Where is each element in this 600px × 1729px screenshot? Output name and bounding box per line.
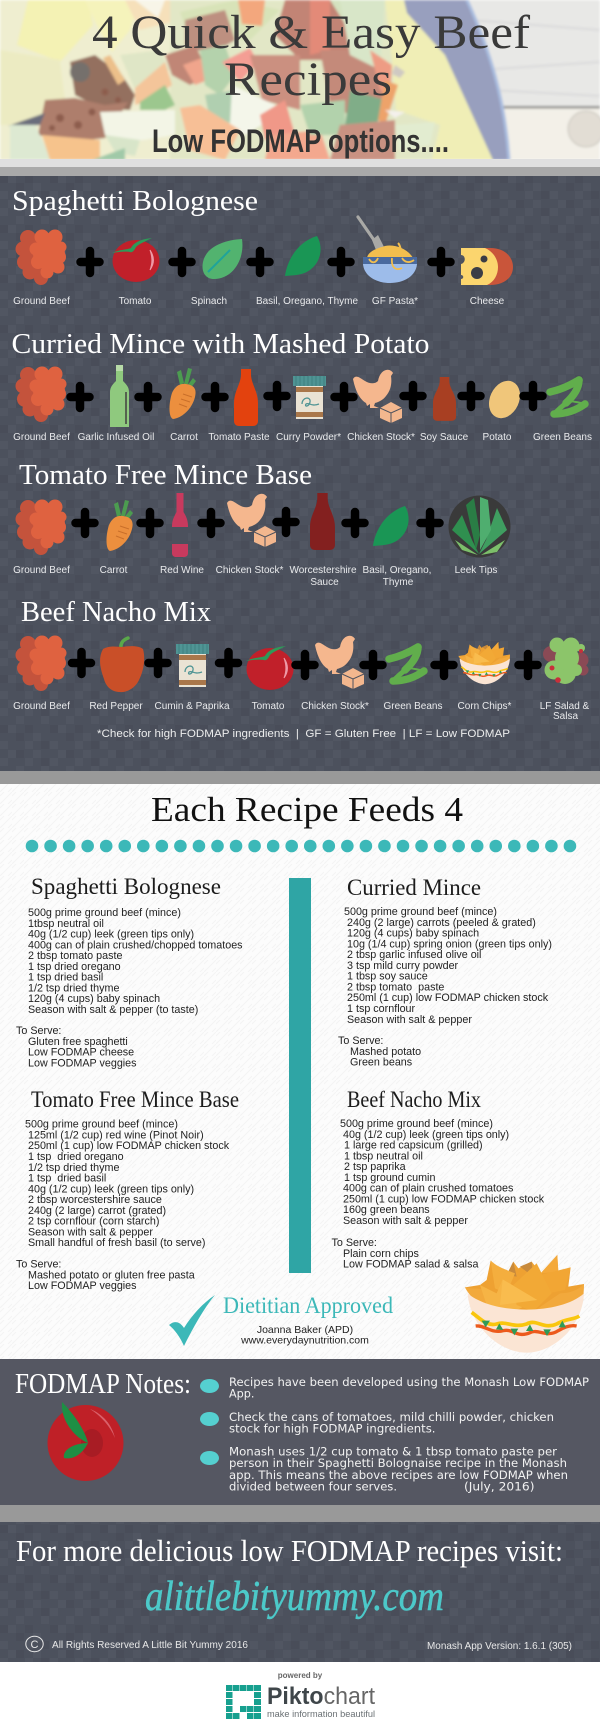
heading: FODMAP Notes: FODMAP Notes: [15, 1369, 191, 1400]
recipe: Spaghetti Bolognese: 40g (1/2 cup) leek (green tips only) [28, 928, 194, 940]
recipe: Beef Nacho Mix: 160g green beans [343, 1204, 430, 1216]
recipe: Tomato Free Mince Base: 250ml (1 cup) low FODMAP chicken stock [28, 1140, 230, 1152]
heading: Spaghetti Bolognese: Spaghetti Bolognese [12, 186, 258, 217]
recipe: Beef Nacho Mix: 1 tbsp neutral oil [344, 1150, 423, 1162]
recipe: Beef Nacho Mix: 2 tsp paprika [344, 1161, 406, 1173]
icon row: Curried Mince [16, 365, 585, 427]
labels: Tomato Free Mince Base [13, 565, 497, 588]
note 2: Check the cans of tomatoes, mild chilli powder, chicken [229, 1410, 554, 1424]
icon: check mark [169, 1295, 215, 1346]
panel: ingredient equations [0, 176, 600, 771]
heading: Beef Nacho Mix: Beef Nacho Mix [21, 597, 211, 628]
labels: Curried Mince: Garlic Infused Oil [78, 432, 154, 443]
icon row: Spaghetti Bolognese [16, 217, 513, 285]
recipe: Beef Nacho Mix: Beef Nacho Mix [347, 1087, 481, 1112]
dotted divider [32, 840, 570, 852]
recipe: Spaghetti Bolognese: 500g prime ground beef (mince) [28, 907, 181, 919]
recipe: Curried Mince: 2 tbsp tomato paste [347, 981, 444, 993]
labels: Beef Nacho Mix [13, 701, 590, 722]
recipe: Beef Nacho Mix: 400g can of plain crushed tomatoes [343, 1183, 513, 1195]
icon: pasta bowl [358, 217, 417, 283]
icon: cheese [461, 248, 513, 285]
labels: Beef Nacho Mix: Cumin & Paprika [154, 701, 230, 712]
labels: Spaghetti Bolognese: GF Pasta* [372, 296, 418, 307]
recipe: Spaghetti Bolognese: 120g (4 cups) baby spinach [28, 993, 160, 1005]
recipe: Tomato Free Mince Base: 1 tsp dried basil [28, 1173, 106, 1185]
labels: Curried Mince: Ground Beef [13, 432, 70, 443]
labels: Tomato Free Mince Base: Leek Tips [455, 565, 497, 576]
recipe: Beef Nacho Mix [332, 1087, 545, 1270]
icon: salad [543, 638, 588, 684]
labels: Spaghetti Bolognese: Spinach [191, 296, 227, 307]
recipe: Beef Nacho Mix: To Serve: [332, 1237, 377, 1249]
recipe: Curried Mince: 10g (1/4 cup) spring onion (green tips only) [347, 938, 552, 950]
dietitian approved: Joanna Baker (APD) [257, 1324, 353, 1336]
recipe: Curried Mince: Curried Mince [347, 875, 481, 900]
labels: Beef Nacho Mix: LF Salad & [540, 701, 590, 712]
recipe: Tomato Free Mince Base: 40g (1/2 cup) leek (green tips only) [28, 1183, 194, 1195]
recipe: Curried Mince: 120g (4 cups) baby spinach [347, 928, 479, 940]
labels: Curried Mince: Tomato Paste [208, 432, 270, 443]
recipe: Tomato Free Mince Base: Low FODMAP veggies [28, 1280, 137, 1292]
recipe: Beef Nacho Mix: 250ml (1 cup) low FODMAP chicken stock [343, 1193, 545, 1205]
dietitian approved: Dietitian Approved [223, 1293, 393, 1318]
note 3: app. This means the above recipes are low FODMAP when [229, 1468, 568, 1482]
recipe: Beef Nacho Mix: Low FODMAP salad & salsa [343, 1258, 478, 1270]
recipe: Curried Mince: Mashed potato [350, 1046, 421, 1058]
recipe: Spaghetti Bolognese: To Serve: [16, 1025, 61, 1037]
labels: Beef Nacho Mix: Corn Chips* [458, 701, 512, 712]
labels: Tomato Free Mince Base: Basil, Oregano, [363, 565, 431, 576]
labels: Curried Mince: Soy Sauce [420, 432, 469, 443]
copyright [26, 1636, 248, 1652]
note 2 [229, 1410, 554, 1436]
recipe: Curried Mince: 2 tbsp garlic infused olive oil [347, 949, 481, 961]
labels: Curried Mince: Curry Powder* [276, 432, 341, 443]
recipe: Tomato Free Mince Base: Small handful of fresh basil (to serve) [28, 1237, 205, 1249]
labels: Tomato Free Mince Base: Red Wine [160, 565, 204, 576]
labels: Beef Nacho Mix: Chicken Stock* [301, 701, 369, 712]
labels: Curried Mince: Carrot [170, 432, 198, 443]
recipe: Curried Mince: Season with salt & pepper [347, 1014, 472, 1026]
note 3 [229, 1444, 568, 1494]
copyright: C [31, 1639, 39, 1651]
recipe: Tomato Free Mince Base: 2 tbsp worcestershire sauce [28, 1194, 162, 1206]
note 3: person in their Spaghetti Bolognaise recipe in the Monash [229, 1456, 567, 1470]
recipe: Tomato Free Mince Base: To Serve: [16, 1259, 61, 1271]
note 3: divided between four serves. [229, 1480, 397, 1494]
labels: Tomato Free Mince Base: Sauce [310, 577, 339, 588]
recipe: Spaghetti Bolognese [16, 874, 243, 1069]
icon: red pepper [100, 638, 144, 692]
labels: Curried Mince: Chicken Stock* [347, 432, 415, 443]
labels: Curried Mince: Green Beans [533, 432, 592, 443]
wordmark: Piktochart [267, 1683, 375, 1710]
heading: Curried Mince with Mashed Potato: Curried Mince with Mashed Potato [12, 329, 430, 360]
recipe: Spaghetti Bolognese: 1/2 tsp dried thyme [28, 982, 119, 994]
labels: Curried Mince: Potato [483, 432, 512, 443]
icon row: Tomato Free Mince Base [16, 493, 510, 558]
labels: Beef Nacho Mix: Salsa [553, 711, 578, 722]
recipe: Beef Nacho Mix: 1 large red capsicum (grilled) [344, 1140, 483, 1152]
labels: Spaghetti Bolognese: Cheese [470, 296, 505, 307]
recipe: Curried Mince: 250ml (1 cup) low FODMAP chicken stock [347, 992, 549, 1004]
title: Recipes [224, 53, 392, 106]
icon: basil [373, 506, 409, 546]
recipe: Curried Mince: 500g prime ground beef (mince) [344, 906, 497, 918]
labels: Beef Nacho Mix: Tomato [252, 701, 285, 712]
recipe: Curried Mince: 240g (2 large) carrots (peeled & grated) [347, 917, 536, 929]
recipe: Curried Mince: To Serve: [338, 1035, 383, 1047]
panel: FODMAP notes [0, 1359, 600, 1505]
recipe: Spaghetti Bolognese: Low FODMAP cheese [28, 1046, 134, 1058]
note 1 [229, 1375, 589, 1400]
footnote: *Check for high FODMAP ingredients | GF = Gluten Free | LF = Low FODMAP [97, 728, 510, 740]
icon: tomato [48, 1402, 124, 1481]
recipe: Curried Mince: 1 tbsp soy sauce [347, 971, 428, 983]
recipe: Tomato Free Mince Base: 240g (2 large) carrot (grated) [28, 1205, 166, 1217]
recipe: Spaghetti Bolognese: 1 tsp dried basil [28, 972, 103, 984]
recipe: Tomato Free Mince Base: 1/2 tsp dried thyme [28, 1162, 119, 1174]
note 3: Monash uses 1/2 cup tomato & 1 tbsp tomato paste per [229, 1444, 557, 1458]
recipe: Beef Nacho Mix: Season with salt & pepper [343, 1215, 468, 1227]
labels: Tomato Free Mince Base: Thyme [383, 577, 414, 588]
recipe: Tomato Free Mince Base: Season with salt & pepper [28, 1226, 153, 1238]
recipe: Spaghetti Bolognese: 1 tsp dried oregano [28, 961, 121, 973]
title: 4 Quick & Easy Beef [92, 6, 530, 59]
title [92, 6, 530, 106]
recipe: Beef Nacho Mix: 40g (1/2 cup) leek (green tips only) [343, 1129, 509, 1141]
recipe: Spaghetti Bolognese: 1tbsp neutral oil [28, 918, 104, 930]
recipe: Spaghetti Bolognese: 2 tbsp tomato paste [28, 950, 122, 962]
recipe: Curried Mince: 3 tsp mild curry powder [347, 960, 459, 972]
recipe: Tomato Free Mince Base: Tomato Free Mince Base [31, 1087, 239, 1112]
footer: Piktochart branding: powered by [278, 1671, 323, 1680]
dietitian approved: www.everydaynutrition.com [240, 1334, 369, 1346]
note 3: (July, 2016) [464, 1480, 534, 1494]
recipe: Spaghetti Bolognese: Spaghetti Bolognese [31, 874, 221, 899]
labels: Spaghetti Bolognese: Ground Beef [13, 296, 70, 307]
heading: Each Recipe Feeds 4: Each Recipe Feeds 4 [151, 790, 463, 829]
header: food photo with title [0, 0, 600, 160]
app version: Monash App Version: 1.6.1 (305) [427, 1640, 572, 1652]
labels: Beef Nacho Mix: Ground Beef [13, 701, 70, 712]
recipe: Tomato Free Mince Base: 500g prime ground beef (mince) [25, 1119, 178, 1131]
recipe: Beef Nacho Mix: Plain corn chips [343, 1248, 419, 1260]
icon: garlic oil bottle [110, 365, 129, 427]
recipe: Beef Nacho Mix: 500g prime ground beef (mince) [340, 1118, 493, 1130]
icon row: Beef Nacho Mix [16, 636, 588, 692]
footer: Piktochart branding [0, 1662, 600, 1729]
labels: Tomato Free Mince Base: Chicken Stock* [216, 565, 284, 576]
labels: Spaghetti Bolognese [13, 296, 505, 307]
recipe: Tomato Free Mince Base: Mashed potato or gluten free pasta [28, 1270, 195, 1282]
heading: Tomato Free Mince Base: Tomato Free Mince Base [19, 460, 312, 491]
recipe: Beef Nacho Mix: 1 tsp ground cumin [344, 1172, 435, 1184]
icon: bowl of corn chips [465, 1255, 584, 1353]
centre teal bar [289, 878, 311, 1273]
labels: Beef Nacho Mix: Red Pepper [89, 701, 143, 712]
labels: Tomato Free Mince Base: Worcestershire [289, 565, 357, 576]
subtitle: Low FODMAP options.... [152, 123, 449, 159]
recipe: Curried Mince [338, 875, 552, 1068]
website name: alittlebityummy.com [145, 1574, 444, 1620]
dietitian approved [223, 1293, 393, 1346]
recipe: Spaghetti Bolognese: Season with salt & pepper (to taste) [28, 1004, 198, 1016]
panel: recipes [0, 784, 600, 1359]
copyright: All Rights Reserved A Little Bit Yummy 2016 [52, 1639, 248, 1651]
labels: Spaghetti Bolognese: Basil, Oregano, Thyme [256, 296, 358, 307]
recipe: Tomato Free Mince Base: 2 tsp cornflour (corn starch) [28, 1216, 159, 1228]
recipe: Tomato Free Mince Base: 1 tsp dried oregano [28, 1151, 124, 1163]
note 2: stock for high FODMAP ingredients. [229, 1422, 436, 1436]
call to action heading: For more delicious low FODMAP recipes visit: [16, 1533, 563, 1568]
labels: Tomato Free Mince Base: Carrot [100, 565, 128, 576]
background photo of nachos on plate [0, 0, 600, 160]
labels: Beef Nacho Mix: Green Beans [384, 701, 442, 712]
panel: website call to action [0, 1522, 600, 1662]
wordmark: make information beautiful [267, 1709, 375, 1720]
recipe: Tomato Free Mince Base: 125ml (1/2 cup) red wine (Pinot Noir) [28, 1130, 204, 1142]
labels: Curried Mince [13, 432, 592, 443]
recipe: Curried Mince: Green beans [350, 1056, 412, 1068]
icon: Piktochart logo [226, 1685, 261, 1719]
note 1: App. [229, 1386, 254, 1400]
icon: potato [483, 376, 526, 423]
bullets [200, 1379, 219, 1465]
icon: basil [285, 236, 321, 276]
labels: Spaghetti Bolognese: Tomato [119, 296, 152, 307]
icon: spinach [202, 239, 242, 279]
recipe: Tomato Free Mince Base [16, 1087, 239, 1292]
icon: leek tips [448, 496, 510, 558]
recipe: Curried Mince: 1 tsp cornflour [347, 1003, 416, 1015]
recipe: Spaghetti Bolognese: Gluten free spaghetti [28, 1036, 128, 1048]
labels: Tomato Free Mince Base: Ground Beef [13, 565, 70, 576]
recipe: Spaghetti Bolognese: 400g can of plain crushed/chopped tomatoes [28, 939, 243, 951]
note 1: Recipes have been developed using the Monash Low FODMAP [229, 1375, 589, 1389]
recipe: Spaghetti Bolognese: Low FODMAP veggies [28, 1057, 137, 1069]
icon: red wine bottle [172, 493, 188, 557]
